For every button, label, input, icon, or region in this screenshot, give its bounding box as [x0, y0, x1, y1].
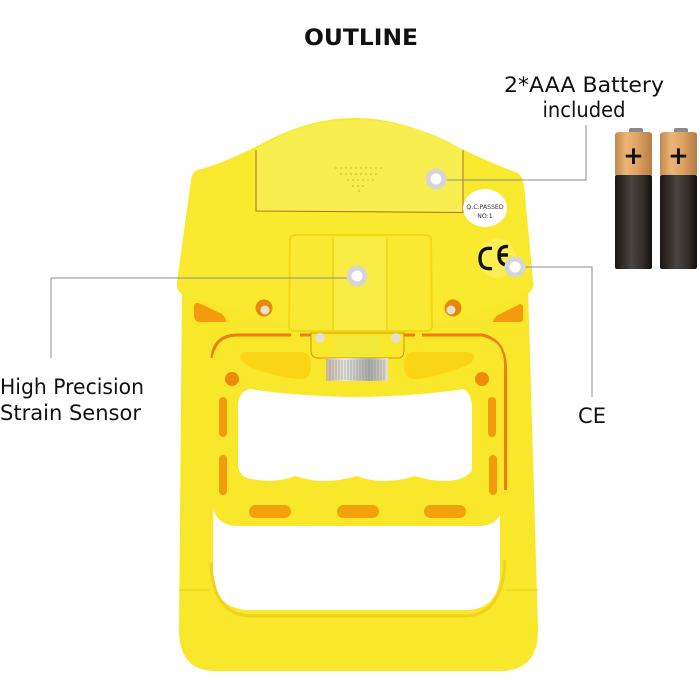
orange dot left: [225, 372, 239, 386]
orange slot: upper right: [493, 304, 523, 322]
lower frame: [179, 285, 538, 671]
callout: strain sensor: High Precision: [0, 375, 144, 399]
icon: battery left: [615, 128, 652, 269]
callout: strain sensor: Strain Sensor: [0, 401, 141, 425]
orange band behind handle: [212, 335, 506, 490]
CE mark: [478, 238, 516, 278]
handle: [212, 337, 504, 526]
frame joint lines: [179, 589, 538, 591]
finger recess left: [240, 352, 311, 379]
screw right: [444, 300, 462, 316]
Q.C. passed sticker: NO:1: [477, 213, 493, 220]
bottom slots: [249, 505, 466, 518]
frame inner rim: [211, 560, 505, 616]
knurled metal roller: [326, 358, 388, 381]
callout: battery: included: [542, 98, 626, 122]
bracket screw right: [391, 333, 401, 343]
icon: battery right: +: [668, 141, 689, 170]
orange dot right: [475, 372, 489, 386]
callout: battery: 2*AAA Battery: [504, 73, 664, 97]
battery cover: [256, 120, 463, 212]
icon: battery left: +: [623, 141, 644, 170]
side slots: [219, 397, 497, 495]
raised sensor plate: [289, 235, 432, 331]
callout: CE: [507, 259, 606, 428]
callout: battery: [428, 73, 664, 187]
title: OUTLINE: [304, 26, 418, 51]
bracket screw left: [315, 333, 325, 343]
device: hand grip dynamometer: [177, 118, 538, 671]
icon: battery right: [660, 128, 697, 269]
callout: strain sensor: [0, 268, 365, 425]
callout: CE: CE: [578, 404, 606, 428]
Q.C. passed sticker: Q.C.PASSED: [466, 204, 504, 211]
sensor bracket: [311, 333, 404, 358]
orange slot: upper left: [194, 303, 226, 322]
screw left: [256, 300, 272, 316]
speaker dots: [335, 167, 382, 192]
Q.C. passed sticker: [463, 189, 507, 227]
finger recess right: [404, 352, 474, 379]
head: [177, 118, 533, 332]
